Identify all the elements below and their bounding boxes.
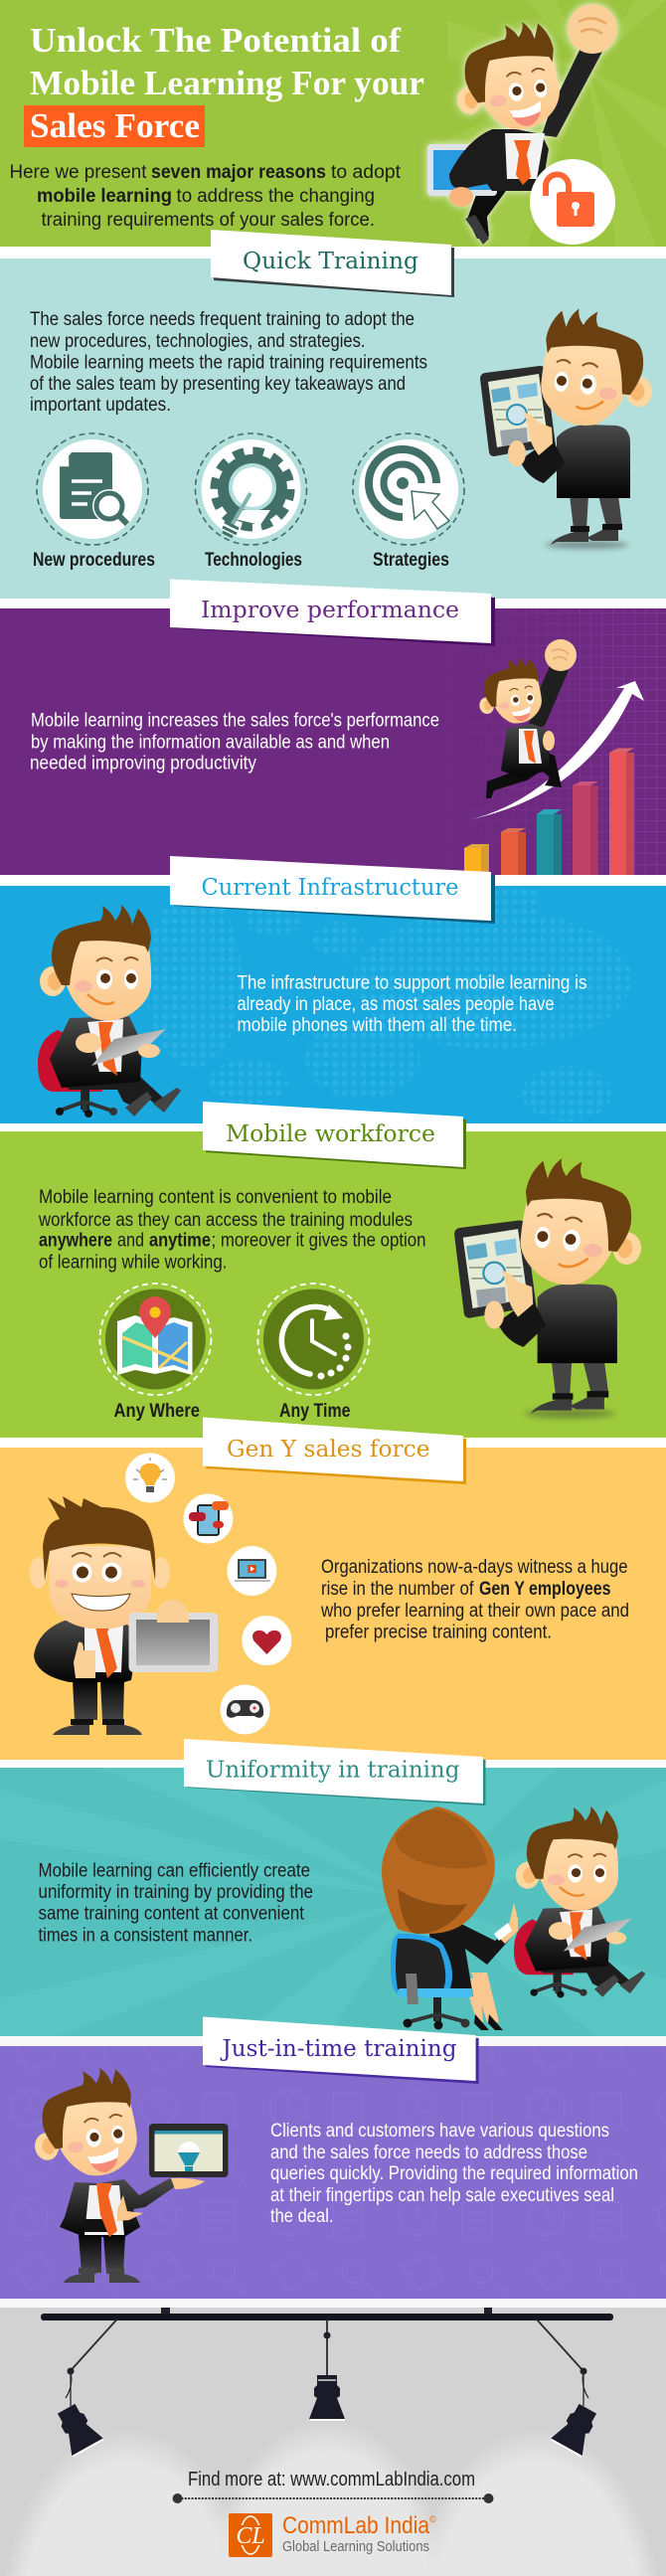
- text block: workforce as they can access the training modules: [38, 1210, 413, 1231]
- text block: of learning while working.: [39, 1253, 227, 1273]
- logo: [229, 2512, 436, 2557]
- illustration: seated man with tablet: [38, 905, 181, 1117]
- text block: anywhere: [39, 1231, 112, 1251]
- text block: and the sales force needs to address those: [270, 2143, 587, 2163]
- text block: prefer precise training content.: [325, 1623, 552, 1642]
- text block: [38, 1187, 425, 1273]
- banner: Gen Y sales force: [203, 1418, 466, 1484]
- text block: Clients and customers have various questions: [270, 2121, 609, 2142]
- icon: heart: [242, 1616, 291, 1665]
- illustration: cheering man with tablet: [427, 4, 617, 245]
- banner: Current Infrastructure: [170, 856, 495, 924]
- text block: ; moreover it gives the option: [211, 1231, 425, 1251]
- text block: needed improving productivity: [30, 754, 256, 773]
- text block: important updates.: [30, 395, 171, 416]
- label: New procedures: [33, 550, 155, 571]
- icon: open lock: [530, 159, 615, 245]
- text block: same training content at convenient: [38, 1903, 305, 1925]
- text block: [30, 710, 439, 773]
- lamp: left: [51, 2400, 104, 2458]
- icon: tablet with bulb: [149, 2124, 229, 2177]
- illustration: smiling man with tablet: [30, 1496, 218, 1735]
- intro text: to adopt: [331, 162, 402, 183]
- panel: header: [0, 0, 666, 247]
- text block: [30, 309, 427, 416]
- text block: Mobile learning increases the sales force's performance: [31, 710, 439, 732]
- text block: [38, 1861, 313, 1947]
- text block: Organizations now-a-days witness a huge: [321, 1557, 628, 1578]
- icon: strategies: [353, 433, 464, 571]
- icon: phone chat: [183, 1493, 233, 1543]
- text block: The infrastructure to support mobile learning is: [237, 972, 586, 994]
- text block: who prefer learning at their own pace and: [320, 1601, 629, 1622]
- banner: Improve performance: Improve performance: [201, 598, 459, 623]
- icon: new procedures: [33, 433, 155, 571]
- text block: uniformity in training by providing the: [38, 1882, 313, 1903]
- panel: just-in-time training: [0, 2016, 666, 2299]
- intro text: mobile learning: [37, 186, 172, 207]
- banner: Mobile workforce: [203, 1102, 466, 1169]
- text block: new procedures, technologies, and strategies.: [30, 331, 366, 352]
- title: Unlock The Potential of: [30, 21, 401, 60]
- text block: and: [117, 1231, 144, 1251]
- panel: quick training: [0, 230, 666, 599]
- text block: [320, 1557, 629, 1642]
- lamp: centre: [309, 2375, 345, 2421]
- arrow: rising growth: [467, 681, 644, 820]
- text block: rise in the number of: [321, 1579, 474, 1600]
- text block: [270, 2121, 638, 2227]
- banner: Uniformity in training: [184, 1739, 485, 1805]
- banner: Uniformity in training: Uniformity in training: [206, 1758, 460, 1784]
- illustration: man using tablet: [480, 305, 660, 549]
- icon: any time: [257, 1284, 369, 1422]
- label: Strategies: [373, 550, 449, 571]
- text block: of the sales team by presenting key takeaways and: [30, 374, 406, 395]
- banner: Just-in-time training: [203, 2016, 479, 2084]
- lamp: right: [550, 2400, 603, 2458]
- banner: Quick Training: [211, 230, 454, 297]
- icon: any where: [99, 1284, 211, 1422]
- logo: ©: [429, 2514, 436, 2524]
- panel: improve performance: [0, 579, 666, 875]
- panel: current infrastructure: [0, 856, 666, 1123]
- banner: Quick Training: Quick Training: [243, 249, 418, 274]
- text block: [237, 972, 586, 1036]
- panel: footer: [0, 2308, 666, 2576]
- title: Mobile Learning For your: [30, 64, 424, 102]
- icon: technologies: [195, 433, 306, 571]
- logo: Global Learning Solutions: [282, 2538, 429, 2555]
- text block: at their fingertips can help sale executives seal: [270, 2185, 614, 2206]
- illustration: leaping man: [473, 639, 577, 798]
- footer link: Find more at: www.commLabIndia.com: [188, 2469, 475, 2490]
- text block: the deal.: [270, 2206, 334, 2227]
- panel: mobile workforce: [0, 1102, 666, 1438]
- title: Sales Force: [30, 106, 200, 145]
- text block: Mobile learning meets the rapid training requirements: [30, 352, 427, 374]
- banner: Gen Y sales force: Gen Y sales force: [227, 1437, 429, 1462]
- icon: video laptop: [227, 1546, 276, 1596]
- banner: Mobile workforce: Mobile workforce: [226, 1121, 435, 1147]
- logo: CL: [236, 2523, 265, 2549]
- label: Any Time: [279, 1401, 350, 1422]
- label: Technologies: [205, 550, 302, 571]
- intro text: [10, 162, 402, 231]
- icon: light bulb: [125, 1454, 175, 1503]
- text block: anytime: [149, 1231, 211, 1251]
- intro text: training requirements of your sales force.: [42, 210, 375, 231]
- label: Any Where: [113, 1401, 200, 1422]
- text block: by making the information available as and when: [31, 732, 390, 754]
- illustration: trainer seen from behind: [382, 1806, 518, 2030]
- logo: CommLab India: [282, 2512, 430, 2539]
- panel: gen y sales force: [0, 1418, 666, 1760]
- intro text: seven major reasons: [151, 162, 326, 183]
- dotted divider: [173, 2493, 493, 2503]
- lighting rig: [41, 2308, 613, 2406]
- text block: mobile phones with them all the time.: [237, 1015, 517, 1036]
- intro text: to address the changing: [177, 186, 375, 207]
- text block: times in a consistent manner.: [38, 1925, 252, 1947]
- text block: Gen Y employees: [479, 1579, 610, 1600]
- banner: Improve performance: [170, 579, 495, 646]
- intro text: Here we present: [10, 162, 147, 183]
- icon: game controller: [221, 1684, 270, 1734]
- banner: Just-in-time training: Just-in-time training: [220, 2036, 457, 2062]
- text block: Mobile learning can efficiently create: [38, 1861, 310, 1881]
- panel: uniformity in training: [0, 1739, 666, 2036]
- illustration: man using tablet: [454, 1155, 650, 1418]
- text block: already in place, as most sales people have: [237, 994, 555, 1015]
- illustration: seated man with tablet: [514, 1806, 645, 1998]
- text block: Mobile learning content is convenient to mobile: [39, 1187, 392, 1208]
- illustration: man presenting tablet: [25, 2064, 205, 2283]
- title: [24, 21, 424, 147]
- banner: Current Infrastructure: Current Infrastructure: [201, 875, 459, 901]
- text block: The sales force needs frequent training to adopt the: [30, 309, 415, 330]
- bar chart: [464, 748, 634, 875]
